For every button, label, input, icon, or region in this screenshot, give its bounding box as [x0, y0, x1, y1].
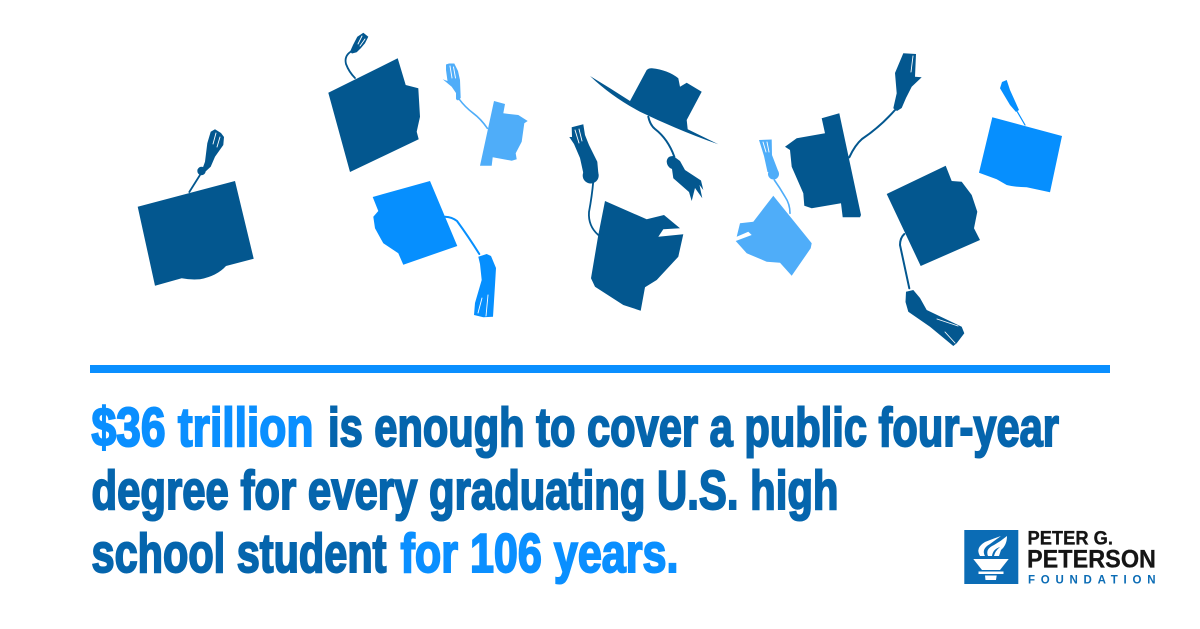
- icon: graduation cap 7 light blue: [736, 140, 812, 276]
- icon: graduation cap 2 dark, upper left: [328, 33, 420, 172]
- icon: graduation cap 9 dark, right: [887, 166, 980, 346]
- logo: Peter G. Peterson Foundation: [964, 528, 1156, 586]
- icon: torch logo mark: [964, 530, 1018, 584]
- logo: Peter G. Peterson Foundation: FOUNDATION: [1028, 574, 1156, 586]
- headline: school student: [92, 522, 386, 584]
- headline: for 106 years.: [400, 522, 678, 584]
- icon: graduation cap 3 light blue: [443, 64, 528, 166]
- icon: graduation cap 4 bright blue: [373, 181, 496, 317]
- icon: graduation cap 6 dark, lower centre: [569, 124, 683, 311]
- divider rule: [90, 365, 1110, 373]
- headline: [92, 396, 1059, 584]
- icon: graduation cap 5 dark, side view hat: [590, 68, 718, 201]
- logo: Peter G. Peterson Foundation: PETER G.: [1028, 528, 1113, 550]
- logo: Peter G. Peterson Foundation: PETERSON: [1027, 546, 1156, 574]
- icon: graduation cap 8 dark, centre right: [785, 53, 922, 217]
- icon: graduation cap 1 dark, far left: [138, 129, 254, 286]
- headline: $36 trillion: [92, 396, 314, 458]
- icon: graduation cap 10 bright blue: [979, 80, 1062, 192]
- headline: degree for every graduating U.S. high: [92, 459, 838, 521]
